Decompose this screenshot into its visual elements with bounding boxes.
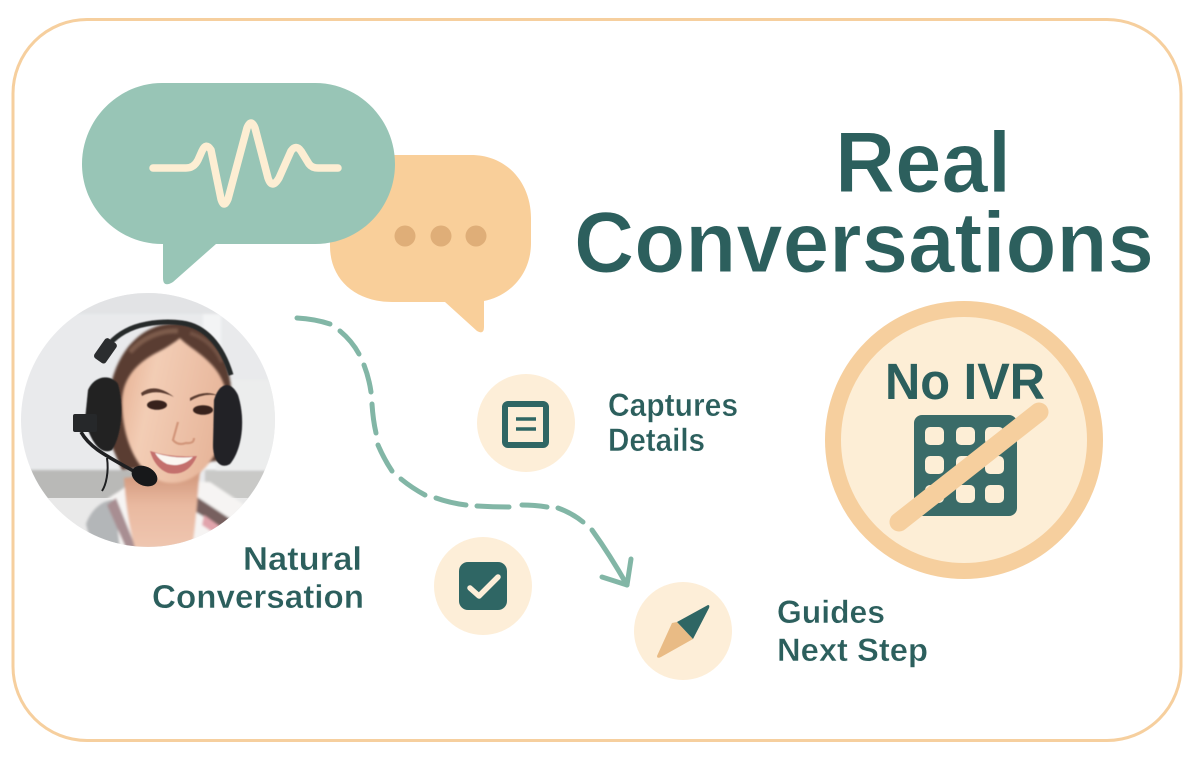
photo: smiling agent wearing headset (20, 292, 280, 548)
slash across keypad (899, 412, 1039, 522)
label: captures details (608, 387, 738, 458)
icon: green speech bubble with waveform (82, 83, 395, 284)
face (122, 338, 227, 483)
label: captures details: Captures (608, 387, 738, 423)
icon: checkbox (434, 537, 532, 635)
title (574, 115, 1154, 291)
ear cups (85, 377, 121, 451)
hair (107, 323, 231, 470)
badge: no IVR keypad (833, 309, 1095, 571)
label: natural conversation: Conversation (152, 578, 364, 615)
label: captures details: Details (608, 422, 705, 458)
label: natural conversation: Natural (243, 540, 362, 577)
icon: keypad (914, 415, 1017, 516)
title: Conversations (574, 195, 1154, 291)
title: Real (835, 115, 1011, 211)
label: guides next step: Guides (777, 594, 885, 630)
label: guides next step (777, 594, 928, 668)
arrow: dashed path to next step (297, 318, 631, 585)
label: natural conversation (152, 540, 364, 615)
headband (100, 322, 231, 375)
icon: captures details document (477, 374, 575, 472)
icon: compass needle (634, 582, 732, 680)
shirt (85, 471, 242, 547)
icon: orange chat bubble with dots (330, 155, 531, 332)
badge label: No IVR (885, 353, 1045, 410)
label: guides next step: Next Step (777, 632, 928, 668)
mic boom and mic (81, 432, 137, 473)
